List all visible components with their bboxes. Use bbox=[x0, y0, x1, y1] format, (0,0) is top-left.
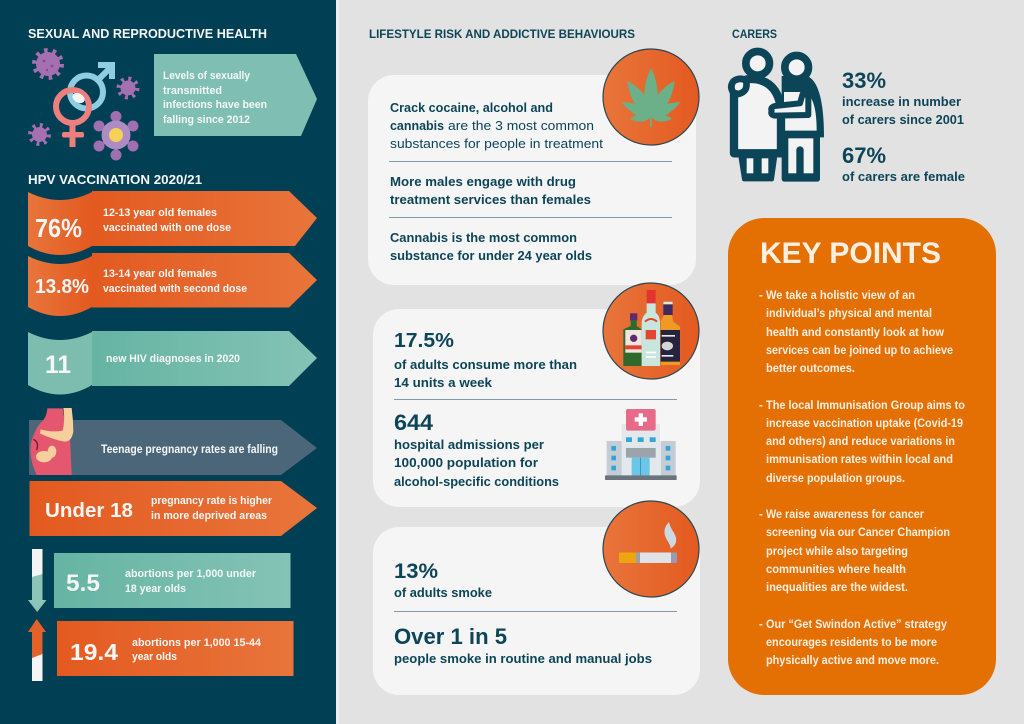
panel: substances: Crack cocaine, alcohol and bbox=[390, 100, 553, 115]
text: cancer screening: - bbox=[759, 509, 763, 521]
panel: smoking: 13% bbox=[394, 560, 438, 583]
heading: key points: KEY POINTS bbox=[760, 237, 941, 270]
stat: 13.8% vaccinated: 13.8% bbox=[35, 276, 89, 298]
text: STI levels: infections have been bbox=[163, 99, 267, 111]
heading: sexual and reproductive health: SEXUAL AND REPRODUCTIVE HEALTH bbox=[28, 27, 267, 41]
panel: substances: treatment services than females bbox=[390, 192, 591, 207]
stats: carers: of carers since 2001 bbox=[842, 112, 964, 127]
stats: carers: of carers are female bbox=[842, 169, 965, 184]
icon: pregnant woman bbox=[30, 408, 73, 475]
panel: smoking: Over 1 in 5 bbox=[394, 624, 507, 649]
stat: 76% vaccinated bbox=[28, 191, 317, 255]
text: cancer screening: We raise awareness for cancer bbox=[766, 509, 924, 521]
text: STI levels: transmitted bbox=[163, 85, 222, 97]
panel: alcohol bbox=[373, 283, 700, 507]
panel: substances: substance for under 24 year olds bbox=[390, 248, 592, 263]
arrow: under 18 pregnancy rate: Under 18 bbox=[45, 500, 133, 522]
panel: substances bbox=[368, 49, 699, 285]
stat: 11 HIV diagnoses bbox=[28, 331, 317, 394]
heading: carers: CARERS bbox=[732, 29, 777, 41]
arrow: under 18 pregnancy rate: in more deprived areas bbox=[151, 510, 267, 522]
text: cancer screening: communities where health bbox=[766, 564, 906, 576]
stats: carers: 67% bbox=[842, 143, 886, 168]
text: cancer screening bbox=[759, 509, 950, 594]
stats: carers: 33% bbox=[842, 68, 886, 93]
arrow: STI levels bbox=[154, 54, 317, 136]
stats: carers: increase in number bbox=[842, 94, 961, 109]
stat: 19.4 abortions: abortions per 1,000 15-44 bbox=[132, 637, 262, 649]
arrow: teenage pregnancy rates: Teenage pregnancy rates are falling bbox=[101, 444, 278, 456]
stat: 13.8% vaccinated: vaccinated with second dose bbox=[103, 283, 247, 295]
panel: left column bbox=[0, 0, 339, 724]
stat: 19.4 abortions: year olds bbox=[132, 651, 177, 663]
panel: alcohol: alcohol-specific conditions bbox=[394, 474, 559, 489]
arrow: under 18 pregnancy rate: pregnancy rate is higher bbox=[151, 495, 273, 507]
text: holistic view: better outcomes. bbox=[766, 363, 855, 375]
text: holistic view: individual’s physical and mental bbox=[766, 308, 932, 320]
heading: lifestyle risk: LIFESTYLE RISK AND ADDICTIVE BEHAVIOURS bbox=[369, 29, 635, 41]
text: immunisation group: diverse population groups. bbox=[766, 473, 905, 485]
icon: carers bbox=[731, 51, 824, 182]
stat: 19.4 abortions bbox=[57, 621, 294, 676]
stat: 19.4 abortions: 19.4 bbox=[70, 639, 118, 665]
text: immunisation group: The local Immunisation Group aims to bbox=[766, 400, 965, 412]
panel: alcohol: 100,000 population for bbox=[394, 455, 538, 470]
panel: alcohol: hospital admissions per bbox=[394, 437, 544, 452]
panel: alcohol: 17.5% bbox=[394, 330, 454, 352]
text: STI levels: falling since 2012 bbox=[163, 114, 250, 126]
text: get swindon active bbox=[759, 619, 948, 667]
text: holistic view: services can be joined up to achieve bbox=[766, 345, 953, 357]
text: immunisation group: and others) and reduce variations in bbox=[766, 436, 955, 448]
panel: key points bbox=[728, 218, 996, 695]
stat: 5.5 abortions: abortions per 1,000 under bbox=[125, 568, 257, 580]
stat: 76% vaccinated: 12-13 year old females bbox=[103, 207, 217, 219]
text: get swindon active: Our “Get Swindon Active” strategy bbox=[766, 619, 948, 631]
heading: HPV vaccination: HPV VACCINATION 2020/21 bbox=[28, 173, 202, 187]
text: immunisation group: - bbox=[759, 400, 763, 412]
panel: substances: Cannabis is the most common bbox=[390, 230, 577, 245]
arrow: teenage pregnancy rates bbox=[29, 408, 317, 475]
text: holistic view: - bbox=[759, 290, 763, 302]
icon: cigarette bbox=[603, 501, 699, 597]
stat: 76% vaccinated: 76% bbox=[35, 213, 82, 243]
text: cancer screening: screening via our Cancer Champion bbox=[766, 527, 950, 539]
icon: hospital bbox=[605, 409, 677, 480]
text: immunisation group: increase vaccination uptake (Covid-19 bbox=[766, 418, 963, 430]
panel: substances: cannabis bbox=[390, 118, 444, 133]
icon: gender symbols and viruses bbox=[30, 50, 138, 160]
text: cancer screening: project while also targeting bbox=[766, 546, 908, 558]
icon: cannabis leaf bbox=[603, 49, 699, 145]
text: immunisation group: immunisation rates within local and bbox=[766, 454, 953, 466]
panel: alcohol: 14 units a week bbox=[394, 375, 493, 390]
text: get swindon active: encourages residents to be more bbox=[766, 637, 937, 649]
text: STI levels: Levels of sexually bbox=[163, 70, 251, 82]
panel: alcohol: of adults consume more than bbox=[394, 357, 577, 372]
icon: up arrow bbox=[28, 619, 46, 681]
stat: 13.8% vaccinated: 13-14 year old females bbox=[103, 268, 217, 280]
text: get swindon active: - bbox=[759, 619, 763, 631]
text: holistic view: We take a holistic view of an bbox=[766, 290, 915, 302]
text: cancer screening: inequalities are the widest. bbox=[766, 582, 908, 594]
text: holistic view: health and constantly look at how bbox=[766, 327, 944, 339]
stat: 5.5 abortions bbox=[54, 553, 290, 608]
panel: alcohol: 644 bbox=[394, 410, 434, 435]
stats: carers bbox=[842, 68, 965, 184]
stat: 11 HIV diagnoses: 11 bbox=[45, 351, 71, 379]
icon: alcohol bottles bbox=[603, 283, 699, 379]
text: STI levels bbox=[163, 70, 267, 126]
panel: substances: substances for people in treatment bbox=[390, 136, 603, 151]
stat: 11 HIV diagnoses: new HIV diagnoses in 2020 bbox=[106, 353, 240, 365]
panel: smoking: of adults smoke bbox=[394, 585, 492, 600]
text: immunisation group bbox=[759, 400, 965, 485]
panel: smoking bbox=[373, 501, 700, 695]
stat: 13.8% vaccinated bbox=[28, 253, 317, 316]
panel: smoking: people smoke in routine and manual jobs bbox=[394, 651, 652, 666]
stat: 5.5 abortions: 18 year olds bbox=[125, 583, 186, 595]
stat: 76% vaccinated: vaccinated with one dose bbox=[103, 222, 231, 234]
text: holistic view bbox=[759, 290, 953, 375]
arrow: under 18 pregnancy rate bbox=[30, 481, 317, 536]
panel: substances: are the 3 most common bbox=[448, 118, 594, 133]
stat: 5.5 abortions: 5.5 bbox=[66, 570, 100, 597]
panel: substances: More males engage with drug bbox=[390, 174, 576, 189]
icon: down arrow bbox=[28, 549, 46, 612]
text: get swindon active: physically active and move more. bbox=[766, 655, 939, 667]
